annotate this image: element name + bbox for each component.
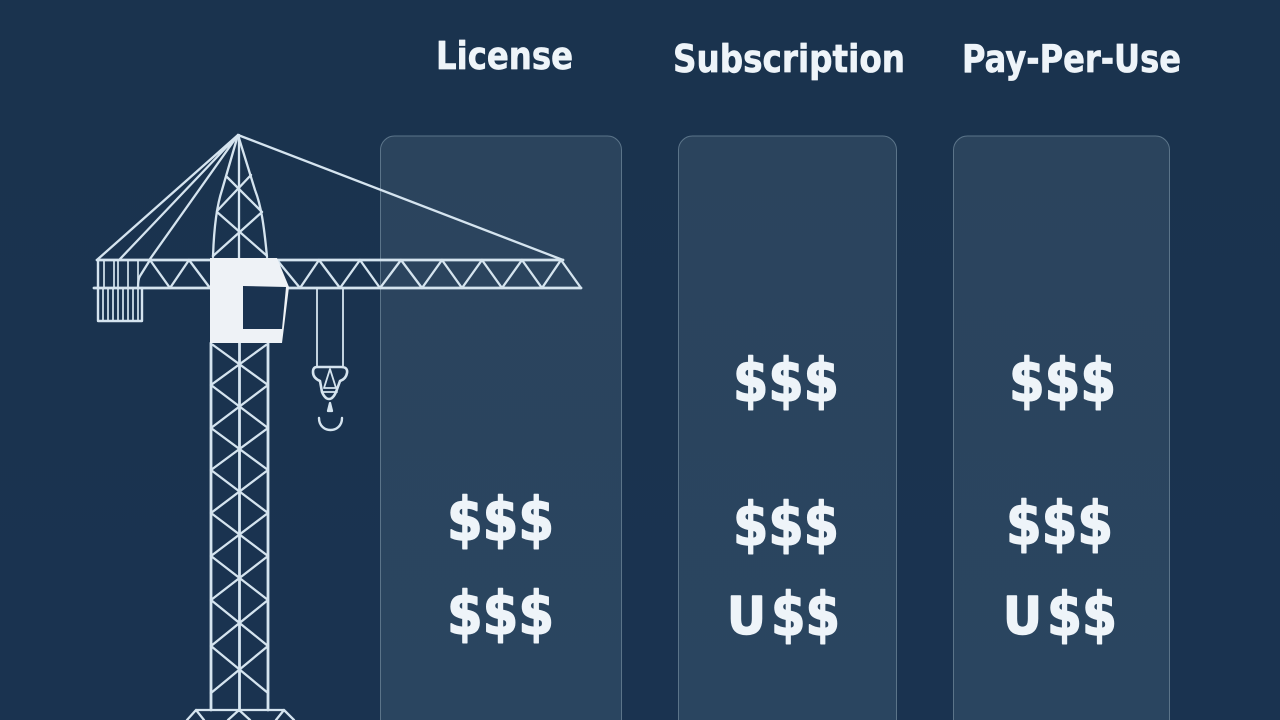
heading: Subscription: Subscription	[673, 37, 905, 81]
price row: Pay-Per-Use bottom	[1003, 580, 1117, 650]
price row: Subscription bottom	[727, 580, 840, 650]
stay cables	[98, 135, 563, 288]
price row: Subscription top: $$$	[733, 346, 839, 416]
hoist cables	[317, 288, 343, 366]
tower base	[187, 710, 294, 720]
price row: Subscription bottom: $$	[771, 580, 840, 650]
price row: Pay-Per-Use top: $$$	[1009, 346, 1116, 416]
price row: Pay-Per-Use bottom: $$	[1047, 580, 1117, 650]
price row: Pay-Per-Use middle: $$$	[1006, 489, 1113, 559]
heading: Pay-Per-Use: Pay-Per-Use	[962, 37, 1181, 81]
icon: crane hook	[313, 367, 347, 430]
illustration: tower crane	[94, 135, 581, 720]
price row: Pay-Per-Use bottom: U	[1003, 587, 1042, 647]
heading: License: License	[436, 34, 573, 78]
jib truss	[94, 260, 581, 288]
price row: Subscription middle: $$$	[733, 490, 839, 560]
counterweight	[98, 260, 142, 321]
crane mast top	[213, 135, 267, 258]
price row: Subscription bottom: U	[727, 587, 766, 647]
crane cab	[210, 258, 289, 343]
panel: Subscription column	[678, 136, 896, 720]
price row: License upper: $$$	[447, 485, 554, 555]
price row: License lower: $$$	[447, 579, 554, 649]
cab window	[243, 286, 286, 329]
tower lattice	[211, 343, 268, 710]
panel: Pay-Per-Use column	[954, 136, 1170, 720]
panel: License column	[380, 136, 622, 720]
